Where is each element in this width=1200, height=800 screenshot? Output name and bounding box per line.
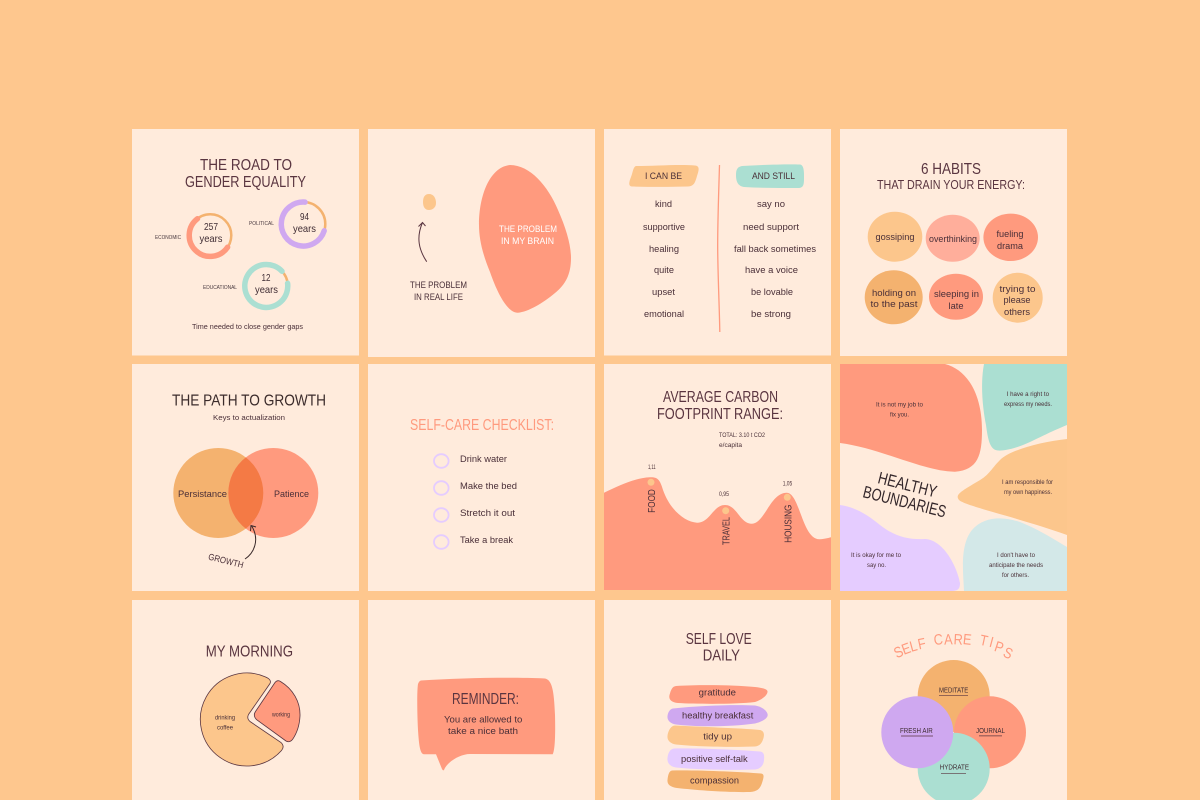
ring chart: educational 12 years <box>245 264 288 308</box>
list: and still words: have a voice <box>745 265 798 275</box>
blob: not my job <box>840 364 982 472</box>
heading: self care tips: A <box>944 630 954 648</box>
bar: positive self-talk: positive self-talk <box>681 754 748 764</box>
heading: healthy boundaries <box>861 468 948 521</box>
blob: responsible for happiness: my own happiness. <box>1004 489 1052 496</box>
circle: meditate <box>918 660 990 732</box>
panel: reminder <box>368 600 595 800</box>
arrow: to growth overlap <box>245 526 256 559</box>
heading: healthy boundaries: HEALTHY <box>876 468 939 501</box>
caption: time needed: Time needed to close gender gaps <box>192 322 303 331</box>
ring chart: political 94 years <box>281 202 325 246</box>
panel: healthy boundaries <box>840 364 1067 591</box>
heading: self care tips: T <box>978 631 990 649</box>
bubble: overthinking <box>926 215 980 262</box>
heading: self love daily: SELF LOVE <box>686 631 752 648</box>
circle: meditate: MEDITATE <box>939 686 968 695</box>
list: i can be words <box>643 199 685 319</box>
heading: 6 habits <box>877 161 1025 192</box>
blob: okay to say no <box>840 505 960 591</box>
blob: anticipate needs: for others. <box>1002 572 1029 579</box>
bar: tidy up: tidy up <box>703 731 732 741</box>
heading: self care tips: E <box>962 630 972 648</box>
bubble: trying to please others <box>993 273 1043 323</box>
ring chart: economic 257 years: years <box>200 233 222 245</box>
text: the problem in real life: IN REAL LIFE <box>414 292 463 302</box>
heading: self care tips: C <box>933 630 944 648</box>
label: educational: EDUCATIONAL <box>203 285 237 291</box>
speech bubble: reminder <box>417 678 555 770</box>
text: you are allowed <box>444 714 522 736</box>
small blob: real life problem <box>423 194 436 210</box>
heading: self care tips: S <box>1001 643 1016 662</box>
bubble: sleeping in late: sleeping in <box>934 289 979 299</box>
circle: hydrate: HYDRATE <box>940 762 969 771</box>
pie chart: morning: coffee <box>217 725 234 732</box>
heading: the path to growth: THE PATH TO GROWTH <box>172 393 326 410</box>
venn diagram: persistance and patience: Patience <box>274 489 309 500</box>
bar: gratitude: gratitude <box>699 688 736 698</box>
list: and still words: say no <box>757 199 785 209</box>
bar: compassion <box>667 770 764 792</box>
ring chart: educational 12 years: years <box>255 284 278 296</box>
divider line <box>718 165 720 332</box>
text: the problem in my brain <box>499 224 557 246</box>
circle: hydrate <box>918 733 990 800</box>
list: i can be words: kind <box>655 199 672 209</box>
bar: healthy breakfast <box>667 705 768 726</box>
heading: self love daily <box>686 631 752 665</box>
checklist item: stretch it out: Stretch it out <box>460 508 516 518</box>
bubble: holding on to the past <box>865 270 923 324</box>
bubble: sleeping in late: late <box>948 301 964 311</box>
ring chart: political 94 years: 94 <box>300 211 309 223</box>
heading: self-care checklist: SELF-CARE CHECKLIST: <box>410 417 554 434</box>
tag: and still: AND STILL <box>752 171 795 181</box>
list: and still words: be lovable <box>751 287 793 297</box>
ring chart: educational 12 years: 12 <box>262 272 271 284</box>
blob: right to express <box>982 364 1067 451</box>
panel: self care tips <box>840 600 1067 800</box>
bar: compassion: compassion <box>690 776 739 786</box>
heading: the road to gender equality: GENDER EQUALITY <box>185 174 306 191</box>
bubble: trying to please others: others <box>1004 307 1031 317</box>
heading: self care tips: L <box>908 637 919 655</box>
checklist item: stretch it out <box>434 508 516 522</box>
arrow: pointing to small blob <box>418 222 427 262</box>
subheading: keys to actualization: Keys to actualization <box>213 415 285 422</box>
checklist item: make the bed: Make the bed <box>460 481 517 491</box>
heading: the road to gender equality: THE ROAD TO <box>200 157 292 174</box>
venn diagram: persistance and patience: Persistance <box>178 489 227 500</box>
circle: journal <box>954 696 1026 768</box>
bubble: fueling drama: fueling <box>996 229 1024 239</box>
tag: i can be <box>629 165 699 187</box>
bubble: trying to please others: please <box>1004 295 1030 305</box>
pie chart: morning: working <box>271 712 290 719</box>
heading: self care tips: E <box>899 639 913 658</box>
label: political: POLITICAL <box>249 221 274 227</box>
text: you are allowed: take a nice bath <box>448 726 518 736</box>
pie chart: morning <box>200 673 300 766</box>
heading: self care tips: F <box>916 634 927 653</box>
bar: gratitude <box>669 685 768 704</box>
blob: responsible for happiness <box>958 439 1067 535</box>
heading: average carbon footprint range <box>657 389 783 423</box>
area chart: carbon footprint: TRAVEL <box>721 517 732 545</box>
panel: the path to growth <box>132 364 359 591</box>
text: total: e/capita <box>719 442 743 449</box>
checklist item: take a break <box>434 535 514 549</box>
panel: my morning <box>132 600 359 800</box>
bubble: gossiping: gossiping <box>876 232 914 242</box>
checklist item: make the bed <box>434 481 517 495</box>
panel: self-care checklist <box>368 364 595 591</box>
text: the problem in real life <box>410 280 467 302</box>
checklist item: drink water: Drink water <box>460 454 507 464</box>
circle: journal: JOURNAL <box>976 726 1005 735</box>
heading: my morning: MY MORNING <box>206 644 293 661</box>
bar: tidy up <box>667 726 764 747</box>
area chart: carbon footprint: HOUSING <box>784 505 795 543</box>
bubble: trying to please others: trying to <box>1000 284 1036 294</box>
text: total: TOTAL: 3.10 t CO2 <box>719 432 765 439</box>
area chart: carbon footprint <box>604 464 831 590</box>
bubble: holding on to the past: to the past <box>870 299 918 309</box>
list: and still words <box>734 199 817 319</box>
blob: right to express: I have a right to <box>1007 391 1050 398</box>
heading: self care tips: I <box>988 633 996 651</box>
text: total <box>719 432 765 449</box>
label: economic: ECONOMIC <box>155 235 181 241</box>
checklist item: take a break: Take a break <box>460 535 514 545</box>
panel: average carbon footprint <box>604 364 831 590</box>
circle: fresh air: FRESH AIR <box>900 726 933 735</box>
list: i can be words: emotional <box>644 309 684 319</box>
list: i can be words: quite <box>654 265 674 275</box>
panel: 6 habits <box>840 129 1067 356</box>
big blob: problem in my brain <box>479 165 571 313</box>
heading: the road to gender equality <box>185 157 306 191</box>
panel: self love daily <box>604 600 831 800</box>
area chart: carbon footprint: 1,05 <box>783 481 793 488</box>
tag: i can be: I CAN BE <box>645 171 682 181</box>
blob: okay to say no: say no. <box>867 562 886 569</box>
blob: anticipate needs <box>963 518 1067 591</box>
text: the problem in my brain: THE PROBLEM <box>499 224 557 234</box>
bubble: gossiping <box>868 212 922 262</box>
heading: reminder: REMINDER: <box>452 691 519 708</box>
ring chart: political 94 years: years <box>293 223 316 235</box>
venn diagram: persistance and patience <box>173 448 318 538</box>
heading: self care tips <box>891 630 1016 662</box>
blob: not my job: It is not my job to <box>876 402 924 409</box>
bar: healthy breakfast: healthy breakfast <box>682 710 754 720</box>
bubble: holding on to the past: holding on <box>872 288 916 298</box>
pie chart: morning: drinking <box>215 715 236 722</box>
circle: fresh air <box>881 696 953 768</box>
heading: 6 habits: THAT DRAIN YOUR ENERGY: <box>877 178 1025 192</box>
bubble: sleeping in late <box>929 274 983 320</box>
panel: i can be and still <box>604 129 831 356</box>
heading: average carbon footprint range: FOOTPRINT RANGE: <box>657 406 783 423</box>
blob: not my job: fix you. <box>890 412 909 419</box>
tag: and still <box>736 164 804 188</box>
blob: responsible for happiness: I am responsible for <box>1002 479 1053 486</box>
blob: right to express: express my needs. <box>1004 401 1052 408</box>
list: i can be words: upset <box>652 287 676 297</box>
ring chart: economic 257 years <box>189 214 231 256</box>
heading: 6 habits: 6 HABITS <box>921 161 981 178</box>
blob: okay to say no: It is okay for me to <box>851 552 902 559</box>
list: and still words: need support <box>743 222 800 232</box>
heading: self love daily: DAILY <box>703 648 740 665</box>
bubble: fueling drama: drama <box>997 241 1023 251</box>
blob: anticipate needs: anticipate the needs <box>989 562 1043 569</box>
area chart: carbon footprint: 0,95 <box>719 491 729 498</box>
area chart: carbon footprint: FOOD <box>647 489 658 513</box>
heading: healthy boundaries: BOUNDARIES <box>861 482 948 521</box>
label: growth: GROWTH <box>207 552 245 570</box>
panel: the road to gender equality <box>132 129 359 356</box>
heading: self care tips: S <box>891 642 906 661</box>
area chart: carbon footprint: 1,11 <box>648 464 656 471</box>
heading: self care tips: R <box>953 630 963 648</box>
text: you are allowed: You are allowed to <box>444 714 522 724</box>
heading: self care tips: P <box>993 637 1006 656</box>
text: the problem in real life: THE PROBLEM <box>410 280 467 290</box>
bar: positive self-talk <box>667 748 764 770</box>
bubble: overthinking: overthinking <box>929 234 977 244</box>
heading: average carbon footprint range: AVERAGE CARBON <box>663 389 778 406</box>
checklist item: drink water <box>434 454 507 468</box>
text: the problem in my brain: IN MY BRAIN <box>501 236 554 246</box>
list: and still words: be strong <box>751 309 791 319</box>
blob: anticipate needs: I don't have to <box>997 552 1036 559</box>
bubble: fueling drama <box>983 214 1038 261</box>
list: i can be words: healing <box>649 244 679 254</box>
panel: the problem <box>368 129 595 357</box>
list: i can be words: supportive <box>643 222 685 232</box>
list: and still words: fall back sometimes <box>734 244 817 254</box>
ring chart: economic 257 years: 257 <box>204 221 218 233</box>
